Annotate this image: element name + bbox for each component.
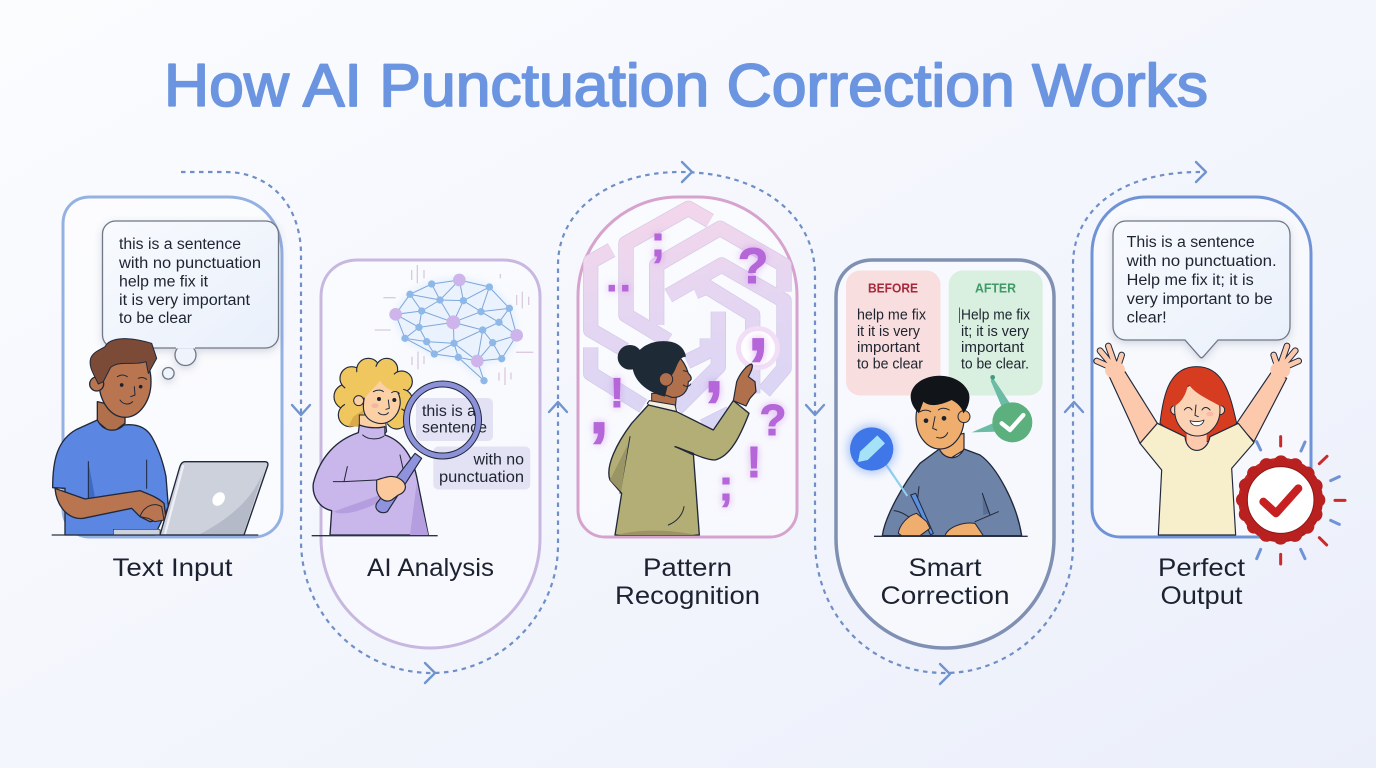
after card: important [961, 339, 1025, 356]
panel frame [63, 197, 282, 537]
before card: it it is very [857, 323, 920, 340]
character: woman pointing [609, 341, 756, 535]
corrected text: very important to be [1127, 291, 1273, 308]
input text: it is very important [119, 292, 251, 309]
panel: perfect output [1092, 197, 1345, 610]
after card: Help me fix [961, 306, 1030, 324]
label: smart correction [880, 554, 1010, 610]
text chips [416, 398, 530, 490]
panel: AI analysis [312, 260, 540, 648]
brain network illustration [375, 265, 533, 385]
floating punctuation marks [589, 217, 786, 510]
after card: AFTER [975, 281, 1017, 296]
before card: to be clear [857, 356, 923, 372]
corrected text: clear! [1127, 310, 1167, 326]
floating punctuation marks: ; [719, 461, 733, 510]
before card: important [857, 339, 921, 356]
label: perfect output [1158, 554, 1245, 610]
corrected text: Help me fix it; it is [1127, 272, 1254, 289]
label: text input: Text Input [112, 554, 233, 582]
label: smart correction: Smart [908, 554, 982, 582]
title: How AI Punctuation Correction Works [164, 52, 1208, 119]
magnifier lens ring [404, 381, 482, 459]
thought bubble [102, 221, 278, 379]
after card: it; it is very [961, 323, 1029, 340]
corrected text [1126, 234, 1277, 326]
analysed text [422, 403, 524, 486]
label: pattern recognition: Recognition [615, 582, 760, 610]
speech bubble [1113, 221, 1290, 358]
analysed text: with no [472, 452, 524, 468]
before card: help me fix [857, 306, 926, 324]
floating punctuation marks: ? [738, 238, 768, 294]
label: perfect output: Perfect [1158, 554, 1245, 582]
analysed text: punctuation [439, 469, 524, 486]
floating punctuation marks: , [704, 329, 724, 407]
input text [118, 236, 261, 327]
corrected text: This is a sentence [1127, 234, 1255, 251]
floating punctuation marks: ? [760, 396, 786, 445]
panel frame [1092, 197, 1311, 537]
before card: BEFORE [868, 281, 918, 296]
label: AI analysis: AI Analysis [367, 554, 494, 582]
floating punctuation marks: ; [651, 217, 665, 266]
icon: pencil badge [848, 425, 907, 496]
character: person typing on laptop [52, 339, 268, 535]
interlocking hexagon bands [591, 208, 784, 427]
panel frame [836, 260, 1054, 648]
input text: to be clear [119, 310, 192, 327]
character: celebrating woman [1097, 346, 1299, 535]
floating punctuation marks: .. [606, 258, 634, 300]
icon: red approval seal [1238, 437, 1345, 564]
floating punctuation marks: , [747, 282, 769, 367]
corrected text: with no punctuation. [1126, 253, 1277, 270]
label: pattern recognition [615, 554, 760, 610]
panel frame [578, 197, 797, 537]
character: man writing [874, 376, 1028, 536]
flow arrowheads [292, 162, 1206, 684]
analysed text: sentence [422, 420, 487, 436]
input text: help me fix it [119, 274, 209, 290]
floating punctuation marks: ! [610, 369, 624, 416]
panel: pattern recognition [578, 197, 797, 610]
input text: with no punctuation [118, 255, 261, 272]
panel frame [321, 260, 540, 648]
panel: text input [52, 197, 282, 582]
panel: smart correction [836, 260, 1054, 648]
before card [846, 270, 940, 396]
after card: to be clear. [961, 356, 1029, 372]
dotted flow connector [181, 172, 1200, 673]
input text: this is a sentence [119, 236, 241, 253]
character: woman with magnifier [312, 358, 438, 536]
floating punctuation marks: ! [747, 438, 761, 487]
after card [949, 270, 1043, 396]
icon: check badge [972, 375, 1032, 442]
analysed text: this is a [422, 403, 476, 420]
label: perfect output: Output [1160, 582, 1243, 610]
label: smart correction: Correction [880, 582, 1010, 610]
floating punctuation marks: , [589, 370, 609, 448]
label: pattern recognition: Pattern [643, 554, 732, 582]
